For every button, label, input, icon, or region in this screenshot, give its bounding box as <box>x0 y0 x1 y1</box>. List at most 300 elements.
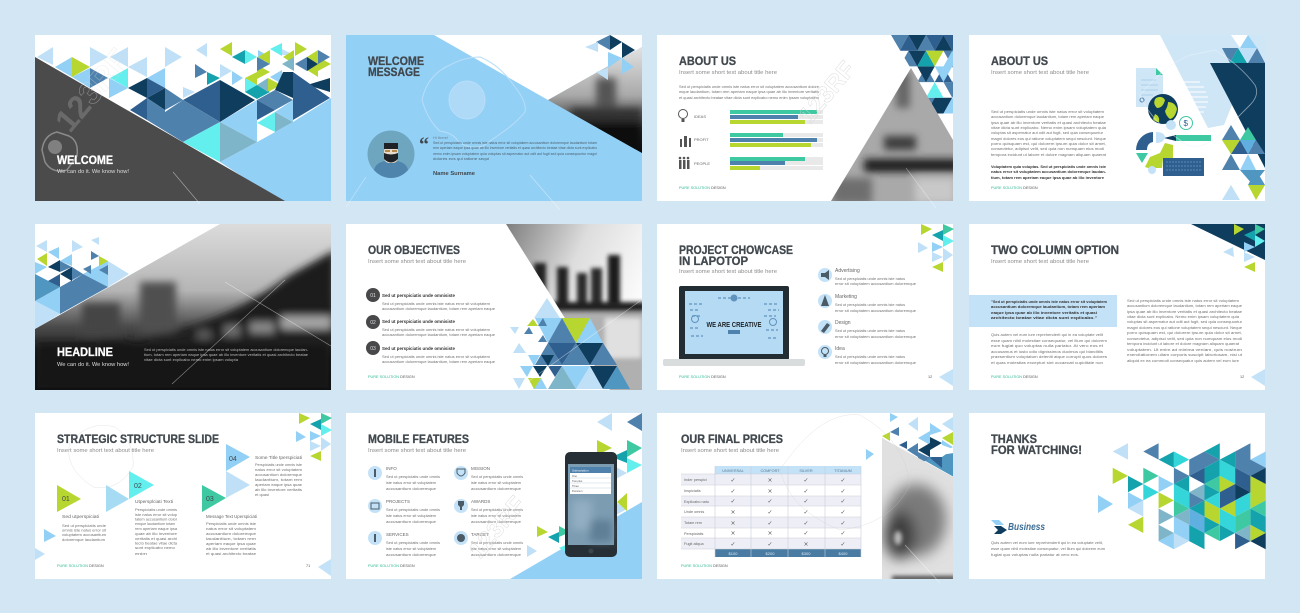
corner triangles <box>35 413 332 560</box>
left column text: Quis autem vel eum iure reprehenderit qui in ea voluptate velit <box>991 332 1104 337</box>
feature: design: error sit voluptatem accusantium doloremque <box>835 334 917 339</box>
feature: target <box>454 531 523 557</box>
logo: Business <box>1008 522 1045 533</box>
subheading: Insert some short text about title here <box>681 448 779 454</box>
text block <box>679 84 820 100</box>
step 04 <box>226 444 303 497</box>
panel: our objectives <box>346 224 645 395</box>
triangles <box>527 413 642 557</box>
checks and crosses: ✓ <box>840 509 846 516</box>
feature: mission: MISSION <box>471 466 490 471</box>
feature: target: Sed ut perspiciatis unde omnis <box>471 540 523 545</box>
footer brand: PURE SOLUTION DESIGN <box>991 186 1038 190</box>
step 02: rem aperiam eaque ipsa <box>135 526 178 531</box>
step 01 <box>57 485 129 542</box>
heading: IN LAPOTOP <box>679 254 748 268</box>
blurred photo <box>500 224 645 395</box>
corner triangles <box>918 224 954 272</box>
feature: target: accusantium doloremque <box>471 552 522 557</box>
feature: awards: iste natus error sit voluptatem <box>471 513 522 518</box>
step 03: et quasi architecto beatae <box>206 551 257 556</box>
triangle mosaic <box>37 42 331 162</box>
objective 03 <box>366 341 496 364</box>
table row labels: Perspiciatis <box>684 532 704 536</box>
arrow triangle <box>44 529 56 542</box>
panel: final prices <box>657 413 956 581</box>
checks and crosses: × <box>767 477 773 484</box>
checks and crosses: ✓ <box>730 477 736 484</box>
feature: marketing: Marketing <box>835 294 857 300</box>
text block: tempora incidunt ut labore et dolore magnam aliquam quaerat <box>991 152 1107 157</box>
text block: Sed ut perspiciatis unde omnis iste natus error sit voluptatem accusantium doloremque laudan- <box>144 347 309 352</box>
feature: projects: iste natus error sit voluptatem <box>386 513 437 518</box>
step 02: sunt explicabo nemo <box>135 545 176 550</box>
watermark label: 123RF <box>48 42 137 138</box>
heading <box>991 432 1082 457</box>
right column text: porro quisquam est, qui dolorem ipsum quia dolor sit amet, <box>1127 330 1242 335</box>
heading: WELCOME <box>57 153 113 167</box>
right column text: magni dolores eos qui ratione voluptatem sequi nesciunt. Neque <box>1127 325 1243 330</box>
icon: globe <box>1148 94 1178 124</box>
objective 01: Sed ut perspiciatis unde omnisiste <box>382 293 456 298</box>
checks and crosses: ✓ <box>730 541 736 548</box>
feature: marketing <box>818 294 917 313</box>
heading: OUR OBJECTIVES <box>368 243 460 257</box>
blurred photo <box>35 224 335 390</box>
heading: PROJECT CHOWCASE <box>679 243 793 257</box>
table row labels: Inspiciatis <box>684 489 701 493</box>
phone mockup <box>565 452 617 557</box>
step 02: tecto beatae vitae dicta <box>135 540 178 546</box>
right column text: consectetur, adipisci velit, sed quia non numquam eius modi <box>1127 336 1242 341</box>
corner triangle <box>318 559 331 576</box>
text block: natus error sit voluptatem accusantium doloremque laudan- <box>991 169 1107 174</box>
triangle mosaic <box>510 298 630 389</box>
triangle mosaic <box>882 413 954 477</box>
sky blue area <box>220 98 331 201</box>
text block: porro quisquam est, qui dolorem ipsum quia dolor sit amet, <box>991 141 1106 146</box>
heading <box>368 54 424 79</box>
step 02 <box>129 471 178 556</box>
heading: HEADLINE <box>57 345 113 359</box>
subheading: Insert some short text about title here <box>57 448 154 454</box>
feature: idea: Idea <box>835 346 845 352</box>
heading: ABOUT US <box>991 54 1048 68</box>
panel: project showcase in laptop <box>657 224 954 390</box>
watermark labels <box>464 56 861 564</box>
subheading: Insert some short text about title here <box>679 70 777 76</box>
feature: services: SERVICES <box>386 532 409 537</box>
laptop mockup: WE ARE CREATIVE <box>706 322 762 329</box>
step 04: Perspiciatis unde omnis iste <box>255 462 303 467</box>
step 03: ab illo inventore veritatis <box>206 546 256 551</box>
bar chart <box>730 110 823 170</box>
step 04: natus error sit voluptatem <box>255 467 303 472</box>
icon: avatar portrait <box>368 130 414 178</box>
objective 02 <box>366 315 496 337</box>
table row labels: Fugit aliqua <box>684 542 705 546</box>
table row labels: Totam rem <box>684 521 702 525</box>
arrow triangle <box>866 449 874 460</box>
step 01: voluptatem accusantium <box>62 532 107 537</box>
step 04: et quasi <box>255 492 269 497</box>
left column text <box>991 332 1108 365</box>
table row labels <box>684 478 709 546</box>
step 01: doloremque laudantium <box>62 537 106 542</box>
icon: quote mark: “ <box>419 134 429 156</box>
step 04: aperiam eaque ipsa quae <box>255 482 303 487</box>
feature: projects: Sed ut perspiciatis unde omnis <box>386 507 440 512</box>
footer brand: PURE SOLUTION DESIGN <box>991 375 1038 379</box>
step 03 <box>202 471 257 556</box>
heading: THANKS <box>991 432 1037 446</box>
quote text: rem aperiam eaque ipsa quae ab illo inventore veritatis et quasi architecto beatae vitae dicta sunt explicabo <box>433 145 598 150</box>
objective 01: 01 <box>370 293 376 299</box>
feature: projects: accusantium doloremque <box>386 519 437 524</box>
laptop mockup <box>663 286 805 366</box>
left column text: esse quam nihil molestiae consequatur, vel illum qui dolorem <box>991 338 1108 343</box>
step 04: laudantium, totam rem <box>255 477 303 482</box>
panel: about us with bars <box>657 35 953 201</box>
step 03: Perspiciatis unde omnis iste <box>206 521 257 526</box>
text block: et quasi architecto beatae vitae dicta sunt explicabo nemo enim ipsam voluptatem <box>679 95 820 100</box>
subheading: Insert some short text about title here <box>368 448 466 454</box>
left column text: accusamus et iusto odio dignissimos ducimus qui blanditiis <box>991 349 1103 354</box>
navy corner <box>1191 224 1265 260</box>
corner triangle <box>1251 369 1265 386</box>
icon: gear <box>1145 143 1173 174</box>
checks and crosses: × <box>803 541 809 548</box>
feature: info <box>368 466 440 491</box>
quote text: Sed ut perspiciatis unde omnis iste natus error sit voluptatem accusantium doloremque laudantium totam <box>433 140 598 145</box>
right column text: Sed ut perspiciatis unde omnis iste natus error sit voluptatem <box>1127 298 1240 303</box>
heading: STRATEGIC STRUCTURE SLIDE <box>57 432 219 446</box>
step 02: tatem accusantium dolor <box>135 516 178 522</box>
footer brand: PURE SOLUTION DESIGN <box>679 186 726 190</box>
objective 03: Sed ut perspiciatis unde omnisiste <box>382 346 456 351</box>
step 03: accusantium doloremque <box>206 531 257 536</box>
icons and row labels: PEOPLE <box>694 161 710 166</box>
phone mockup: One <box>572 474 577 478</box>
text block: voluptas sit aspernatur aut odit aut fugit, sed quia consequuntur <box>991 130 1104 135</box>
prices: $300 <box>802 551 811 556</box>
feature: info: accusantium doloremque <box>386 486 437 491</box>
heading: MOBILE FEATURES <box>368 432 469 446</box>
step 04: 04 <box>229 456 237 463</box>
panel: two column option <box>969 224 1265 390</box>
checks and crosses: ✓ <box>730 498 736 505</box>
feature: design <box>818 320 917 339</box>
panel: welcome message slide <box>346 35 642 201</box>
text block: Voluptatem quia voluptas. Sed ut perspiciatis unde omnis iste <box>991 164 1107 169</box>
text block: Sed ut perspiciatis unde omnis iste natus error sit voluptatem accusantium dolore <box>679 84 820 89</box>
feature: services: accusantium doloremque <box>386 552 437 557</box>
checks and crosses: × <box>730 530 736 537</box>
panel: strategic structure <box>35 413 332 579</box>
step 03: natus error sit voluptatem <box>206 526 257 531</box>
corner triangle <box>939 369 953 386</box>
text block: Quis autem vel eum iure reprehenderit qui in ea voluptate velit, <box>991 540 1103 545</box>
feature: marketing: error sit voluptatem accusantium doloremque <box>835 308 917 313</box>
text block: mque laudantium, totam rem aperiam eaque ipsa quae ab illo inventore veritatis <box>679 89 819 94</box>
feature: mission <box>454 466 523 491</box>
phone mockup: Three <box>572 484 579 488</box>
subheading: We can do it. We know how! <box>57 362 129 368</box>
feature: idea: Sed ut perspiciatis unde omnis iste natus <box>835 354 905 359</box>
feature: awards <box>454 499 523 524</box>
text block <box>144 347 309 362</box>
feature: target: TARGET <box>471 532 489 537</box>
text block: magni dolores eos qui ratione voluptatem sequi nesciunt. Neque <box>991 136 1107 141</box>
name label: Name Surname <box>433 171 475 177</box>
blurred photo <box>831 68 953 201</box>
step 03: Message Text Uperspiciati <box>206 514 257 519</box>
step 04: ab illo inventore veritatis <box>255 487 302 492</box>
watermark mark <box>42 132 77 171</box>
callout band <box>969 295 1117 327</box>
checks and crosses: × <box>730 509 736 516</box>
feature: info: iste natus error sit voluptatem <box>386 480 437 485</box>
corner triangles <box>585 35 635 80</box>
logo <box>991 520 1045 534</box>
blurred photo <box>548 47 642 154</box>
right column text: ipsa quae ab illo inventore veritatis et quasi architecto beatae <box>1127 309 1243 314</box>
feature: advertising <box>818 268 917 286</box>
table row labels: Unde omnis <box>684 510 704 514</box>
feature: marketing: Sed ut perspiciatis unde omnis iste natus <box>835 302 905 307</box>
right column text: voluptas sit aspernatur aut odit aut fugit, sed quia consequuntur <box>1127 319 1243 324</box>
triangle mosaic <box>891 35 953 114</box>
triangle mosaic <box>1113 443 1266 549</box>
feature: advertising: Advertising <box>835 268 860 274</box>
checks and crosses: ✓ <box>840 520 846 527</box>
feature: advertising: error sit voluptatem accusantium doloremque <box>835 281 917 286</box>
feature: info: Sed ut perspiciatis unde omnis <box>386 474 440 479</box>
phone mockup: Two plus <box>572 479 583 483</box>
prices: $100 <box>729 551 738 556</box>
page number: 12 <box>928 375 932 379</box>
checks and crosses: ✓ <box>840 498 846 505</box>
feature: design: Design <box>835 320 851 326</box>
checks and crosses: ✓ <box>840 530 846 537</box>
heading: ABOUT US <box>679 54 736 68</box>
feature: services <box>368 531 440 557</box>
step 03: 03 <box>206 496 214 503</box>
feature: mission: Sed ut perspiciatis unde omnis <box>471 474 523 479</box>
checks and crosses: ✓ <box>767 520 773 527</box>
icon: currency coin <box>1166 116 1192 130</box>
checks and crosses <box>730 477 846 548</box>
quote text: dolores eos qui ratione sequi <box>433 156 489 161</box>
feature: info: INFO <box>386 466 397 471</box>
pale wedge <box>1160 35 1265 128</box>
subheading: We can do it. We know how! <box>57 169 129 175</box>
right column text: exercitationem ullam corporis suscipit laboriosam, nisi ut <box>1127 352 1243 357</box>
prices <box>729 551 848 556</box>
checks and crosses: ✓ <box>840 488 846 495</box>
feature: mission: iste natus error sit voluptatem <box>471 480 522 485</box>
step 02: Utpersplciati Texti <box>135 499 173 504</box>
subheading: Insert some short text about title here <box>679 269 777 275</box>
feature: idea: error sit voluptatem accusantium doloremque <box>835 360 917 365</box>
table header labels: TITANIUM <box>834 469 852 473</box>
step 01: Sed ut perspiciatis unde <box>62 523 107 528</box>
footer brand: PURE SOLUTION DESIGN <box>681 564 728 568</box>
checks and crosses: × <box>730 520 736 527</box>
left column text: praesentium voluptatum deleniti atque corrupti quos dolores <box>991 354 1107 359</box>
icon: currency coin: $ <box>1184 119 1188 128</box>
checks and crosses: ✓ <box>767 509 773 516</box>
heading: TWO COLUMN OPTION <box>991 243 1119 257</box>
right column text <box>1127 298 1243 363</box>
subheading: Insert some short text about title here <box>991 259 1089 265</box>
quote text: Hi there! <box>433 135 448 140</box>
watermark mark <box>422 57 525 147</box>
text block: ipsa quae ab illo inventore veritatis et quasi architecto beatae <box>991 120 1107 125</box>
table header labels <box>722 469 852 473</box>
feature: idea <box>818 345 917 365</box>
checks and crosses: ✓ <box>767 498 773 505</box>
subheading: Insert some short text about title here <box>368 259 466 265</box>
feature: mission: accusantium doloremque <box>471 486 522 491</box>
panel: headline slide <box>35 224 335 390</box>
text block: vitae dicta sunt explicabo nemo enim ipsam volupta <box>144 357 239 362</box>
objective 01: accusantium doloremque laudantium, totam rem aperiam eaque <box>382 306 496 311</box>
step 02: quae ab illo inventore <box>135 531 178 536</box>
icon: pen <box>1156 132 1211 143</box>
checks and crosses: ✓ <box>803 488 809 495</box>
objective 03: 03 <box>370 346 376 352</box>
left column text: eum fugiat quo voluptas nulla pariatur. At vero eos et <box>991 343 1104 348</box>
callout band: architecto beatae vitae dicta sunt explicabo." <box>991 315 1097 320</box>
step 03: aperiam eaque ipsa quae <box>206 541 257 546</box>
feature: awards: accusantium doloremque <box>471 519 522 524</box>
page number: 12 <box>1240 375 1244 379</box>
text block <box>991 540 1106 557</box>
checks and crosses: ✓ <box>803 498 809 505</box>
table row labels: Explicabo natu <box>684 500 709 504</box>
checks and crosses: ✓ <box>840 541 846 548</box>
prices: $400 <box>839 551 848 556</box>
triangle mosaic <box>1222 35 1265 200</box>
callout band: "Sed ut perspiciatis unde omnis iste natus error sit voluptatem <box>991 299 1107 304</box>
step 04: accusantium doloremque <box>255 472 303 477</box>
objective 03: Sed ut perspiciatis unde omnis iste natus error sit voluptatem <box>382 354 491 359</box>
feature: services: Sed ut perspiciatis unde omnis <box>386 540 440 545</box>
step 01: Sed utperspiciati <box>62 514 99 519</box>
quote text: nemo enim ipsam voluptatem quia voluptas sit aspernatur aut odit aut fugit sed quia consequuntur magni <box>433 151 597 156</box>
prices: $200 <box>766 551 775 556</box>
right column text: voluptatem. Ut enim ad minima veniam, quis nostrum <box>1127 347 1243 352</box>
icon: pie chart <box>1136 132 1153 163</box>
icons and row labels <box>678 110 710 169</box>
feature: awards: AWARDS <box>471 499 490 504</box>
checks and crosses: ✓ <box>767 541 773 548</box>
callout band: eaque ipsa quae ab illo inventore veritatis et quasi <box>991 310 1097 315</box>
step 02: iste natus error sit volup <box>135 512 178 517</box>
small arrow triangle <box>1098 495 1113 513</box>
dark triangle <box>35 57 285 201</box>
heading: WELCOME <box>368 54 424 68</box>
checks and crosses: × <box>767 530 773 537</box>
phone mockup: Subscription <box>572 468 589 472</box>
checks and crosses: ✓ <box>730 488 736 495</box>
text block: esse quam nihil molestiae consequatur, vel illum qui dolorem eum <box>991 546 1106 551</box>
step 02: veritatis et quasi archi <box>135 536 177 541</box>
page number: 71 <box>306 564 310 568</box>
right column text: aliquid ex ea commodi consequatur quis autem vel eum iure <box>1127 358 1240 363</box>
panel: about us with icons <box>969 35 1265 201</box>
navy block <box>1210 63 1265 168</box>
step 02: enim <box>135 551 148 556</box>
watermark labels: 123RF <box>464 491 531 564</box>
triangle mosaic <box>35 237 129 329</box>
subheading: Insert some short text about title here <box>991 70 1089 76</box>
white wedge <box>434 35 642 100</box>
footer brand: PURE SOLUTION DESIGN <box>368 375 415 379</box>
left column text: et quas molestias excepturi sint occaecati cupiditate non <box>991 360 1103 365</box>
feature: projects <box>368 499 440 524</box>
panel: welcome slide <box>35 35 331 201</box>
heading: MESSAGE <box>368 65 420 79</box>
footer brand: PURE SOLUTION DESIGN <box>679 375 726 379</box>
table header labels: UNIVERSAL <box>722 469 744 473</box>
step 01: omnis iste natus error sit <box>62 528 107 532</box>
text block: vitae dicta sunt explicabo. Nemo enim ipsam voluptatem quia <box>991 125 1107 130</box>
objective 01: Sed ut perspiciatis unde omnis iste natus error sit voluptatem <box>382 301 491 306</box>
text block: fugiat quo voluptas nulla pariatur at vero eos. <box>991 552 1079 557</box>
checks and crosses: ✓ <box>803 530 809 537</box>
objective 03: accusantium doloremque laudantium, totam rem aperiam eaque <box>382 359 496 364</box>
icons and row labels: IDEAS <box>694 114 706 119</box>
sky corner <box>510 502 642 579</box>
checks and crosses: ✓ <box>803 509 809 516</box>
document stripes <box>1184 82 1208 112</box>
step 01: 01 <box>62 496 70 503</box>
feature: advertising: Sed ut perspiciatis unde omnis iste natus <box>835 276 905 281</box>
checks and crosses: × <box>767 488 773 495</box>
table header labels: COMFORT <box>760 469 780 473</box>
corner triangles <box>1223 224 1265 272</box>
feature: target: iste natus error sit voluptatem <box>471 546 522 551</box>
heading <box>679 243 793 268</box>
checks and crosses: ✓ <box>803 477 809 484</box>
objective 02: Sed ut perspiciatis unde omnisiste <box>382 319 456 324</box>
text block: Sed ut perspiciatis unde omnis iste natus error sit voluptatem <box>991 109 1105 114</box>
step 03: laudantium, totam rem <box>206 536 257 541</box>
text block: consectetur, adipisci velit, sed quia non numquam eius modi <box>991 146 1104 151</box>
objective 01 <box>366 288 496 311</box>
feature: awards: Sed ut perspiciatis unde omnis <box>471 507 523 512</box>
text block: tium, totam rem aperiam eaque ipsa quae ab illo inventore veritatis et quasi architecto beatae <box>144 352 309 357</box>
panel: mobile features <box>346 413 642 579</box>
icon: keyboard <box>1163 158 1204 176</box>
table header labels: SILVER <box>799 469 813 473</box>
panel: thanks for watching <box>969 413 1266 579</box>
step 02: 02 <box>134 483 142 490</box>
quote text <box>433 135 598 161</box>
feature: design: Sed ut perspiciatis unde omnis iste natus <box>835 328 905 333</box>
text block <box>991 109 1107 180</box>
right column text: accusantium doloremque laudantium, totam rem aperiam eaque <box>1127 303 1243 308</box>
step 02: Perspiciatis unde omnis <box>135 507 177 512</box>
table row labels: Inder perspici <box>684 478 707 482</box>
watermark labels: 123RF <box>794 56 861 129</box>
objective 02: Sed ut perspiciatis unde omnis iste natus error sit voluptatem <box>382 327 491 332</box>
phone mockup: Premium <box>572 489 582 493</box>
price table <box>681 466 861 557</box>
icons and row labels: PROFIT <box>694 137 709 142</box>
